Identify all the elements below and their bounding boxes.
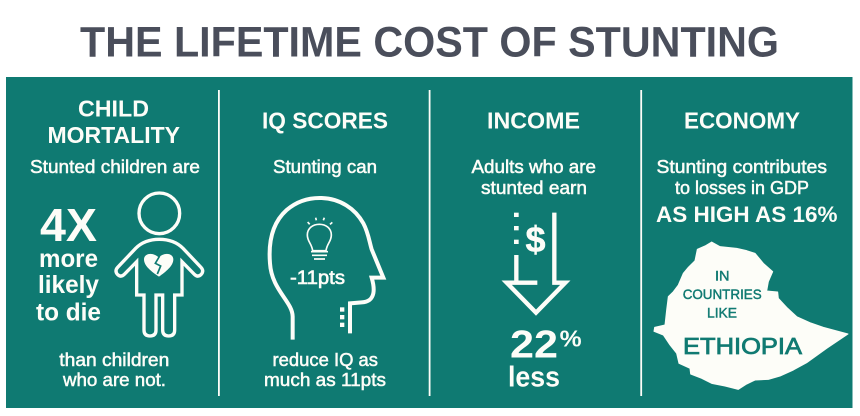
icon: light bulb xyxy=(307,218,332,259)
text: adults who are stunted earn xyxy=(472,157,596,198)
text: stunting can: Stunting can xyxy=(273,157,377,177)
icon: child with broken heart xyxy=(116,193,203,336)
text: stunting contributes to losses in GDP: to losses in GDP xyxy=(675,178,809,198)
map: Ethiopia: ETHIOPIA xyxy=(683,333,802,359)
map: Ethiopia: LIKE xyxy=(707,304,737,320)
title: THE LIFETIME COST OF STUNTING xyxy=(80,18,779,66)
heading: economy: ECONOMY xyxy=(684,108,800,134)
panel: economy xyxy=(654,108,848,389)
panel: IQ scores xyxy=(262,108,388,390)
panel: child mortality xyxy=(30,96,203,390)
text: than children who are not xyxy=(59,350,169,390)
text: stunting contributes to losses in GDP xyxy=(656,157,827,198)
stat: 22 percent less: % xyxy=(560,326,582,352)
text: stunting contributes to losses in GDP: Stunting contributes xyxy=(656,157,827,177)
heading: income: INCOME xyxy=(487,108,580,134)
stat: as high as 16 percent: AS HIGH AS 16% xyxy=(656,202,838,227)
text: adults who are stunted earn: Adults who are xyxy=(472,157,596,177)
heading: IQ scores: IQ SCORES xyxy=(262,108,388,134)
stat: 4X more likely to die: likely xyxy=(38,271,99,299)
text: reduce IQ as much as 11pts xyxy=(264,350,386,390)
stat: 22 percent less: less xyxy=(508,362,560,394)
panel: income xyxy=(472,108,596,394)
stat: 4X more likely to die xyxy=(36,199,101,326)
icon: head outline xyxy=(270,198,383,340)
stat: 4X more likely to die: to die xyxy=(36,298,101,326)
map: Ethiopia: IN xyxy=(715,268,730,284)
text: stunted children are: Stunted children are xyxy=(30,157,200,177)
heading: child mortality: MORTALITY xyxy=(48,122,180,148)
icon: down arrow with dollar: $ xyxy=(526,219,546,260)
stat: 4X more likely to die: more xyxy=(39,245,98,273)
icon: broken heart xyxy=(144,254,173,277)
label: minus 11 points: -11pts xyxy=(290,268,345,289)
map: Ethiopia: COUNTRIES xyxy=(683,286,762,302)
text: adults who are stunted earn: stunted earn xyxy=(481,178,587,198)
stat: 22 percent less: 22 xyxy=(510,324,558,366)
stat: 4X more likely to die: 4X xyxy=(40,199,97,251)
icon: down arrow with dollar xyxy=(507,213,565,313)
text: than children who are not: than children xyxy=(59,350,169,370)
heading: child mortality: CHILD xyxy=(78,96,149,122)
stat: 22 percent less xyxy=(508,324,582,394)
heading: child mortality xyxy=(48,96,180,148)
text: reduce IQ as much as 11pts: much as 11pts xyxy=(264,370,386,390)
map: Ethiopia xyxy=(654,242,848,389)
teal background panel xyxy=(6,77,852,408)
text: than children who are not: who are not. xyxy=(62,370,166,390)
text: reduce IQ as much as 11pts: reduce IQ as xyxy=(272,350,378,370)
